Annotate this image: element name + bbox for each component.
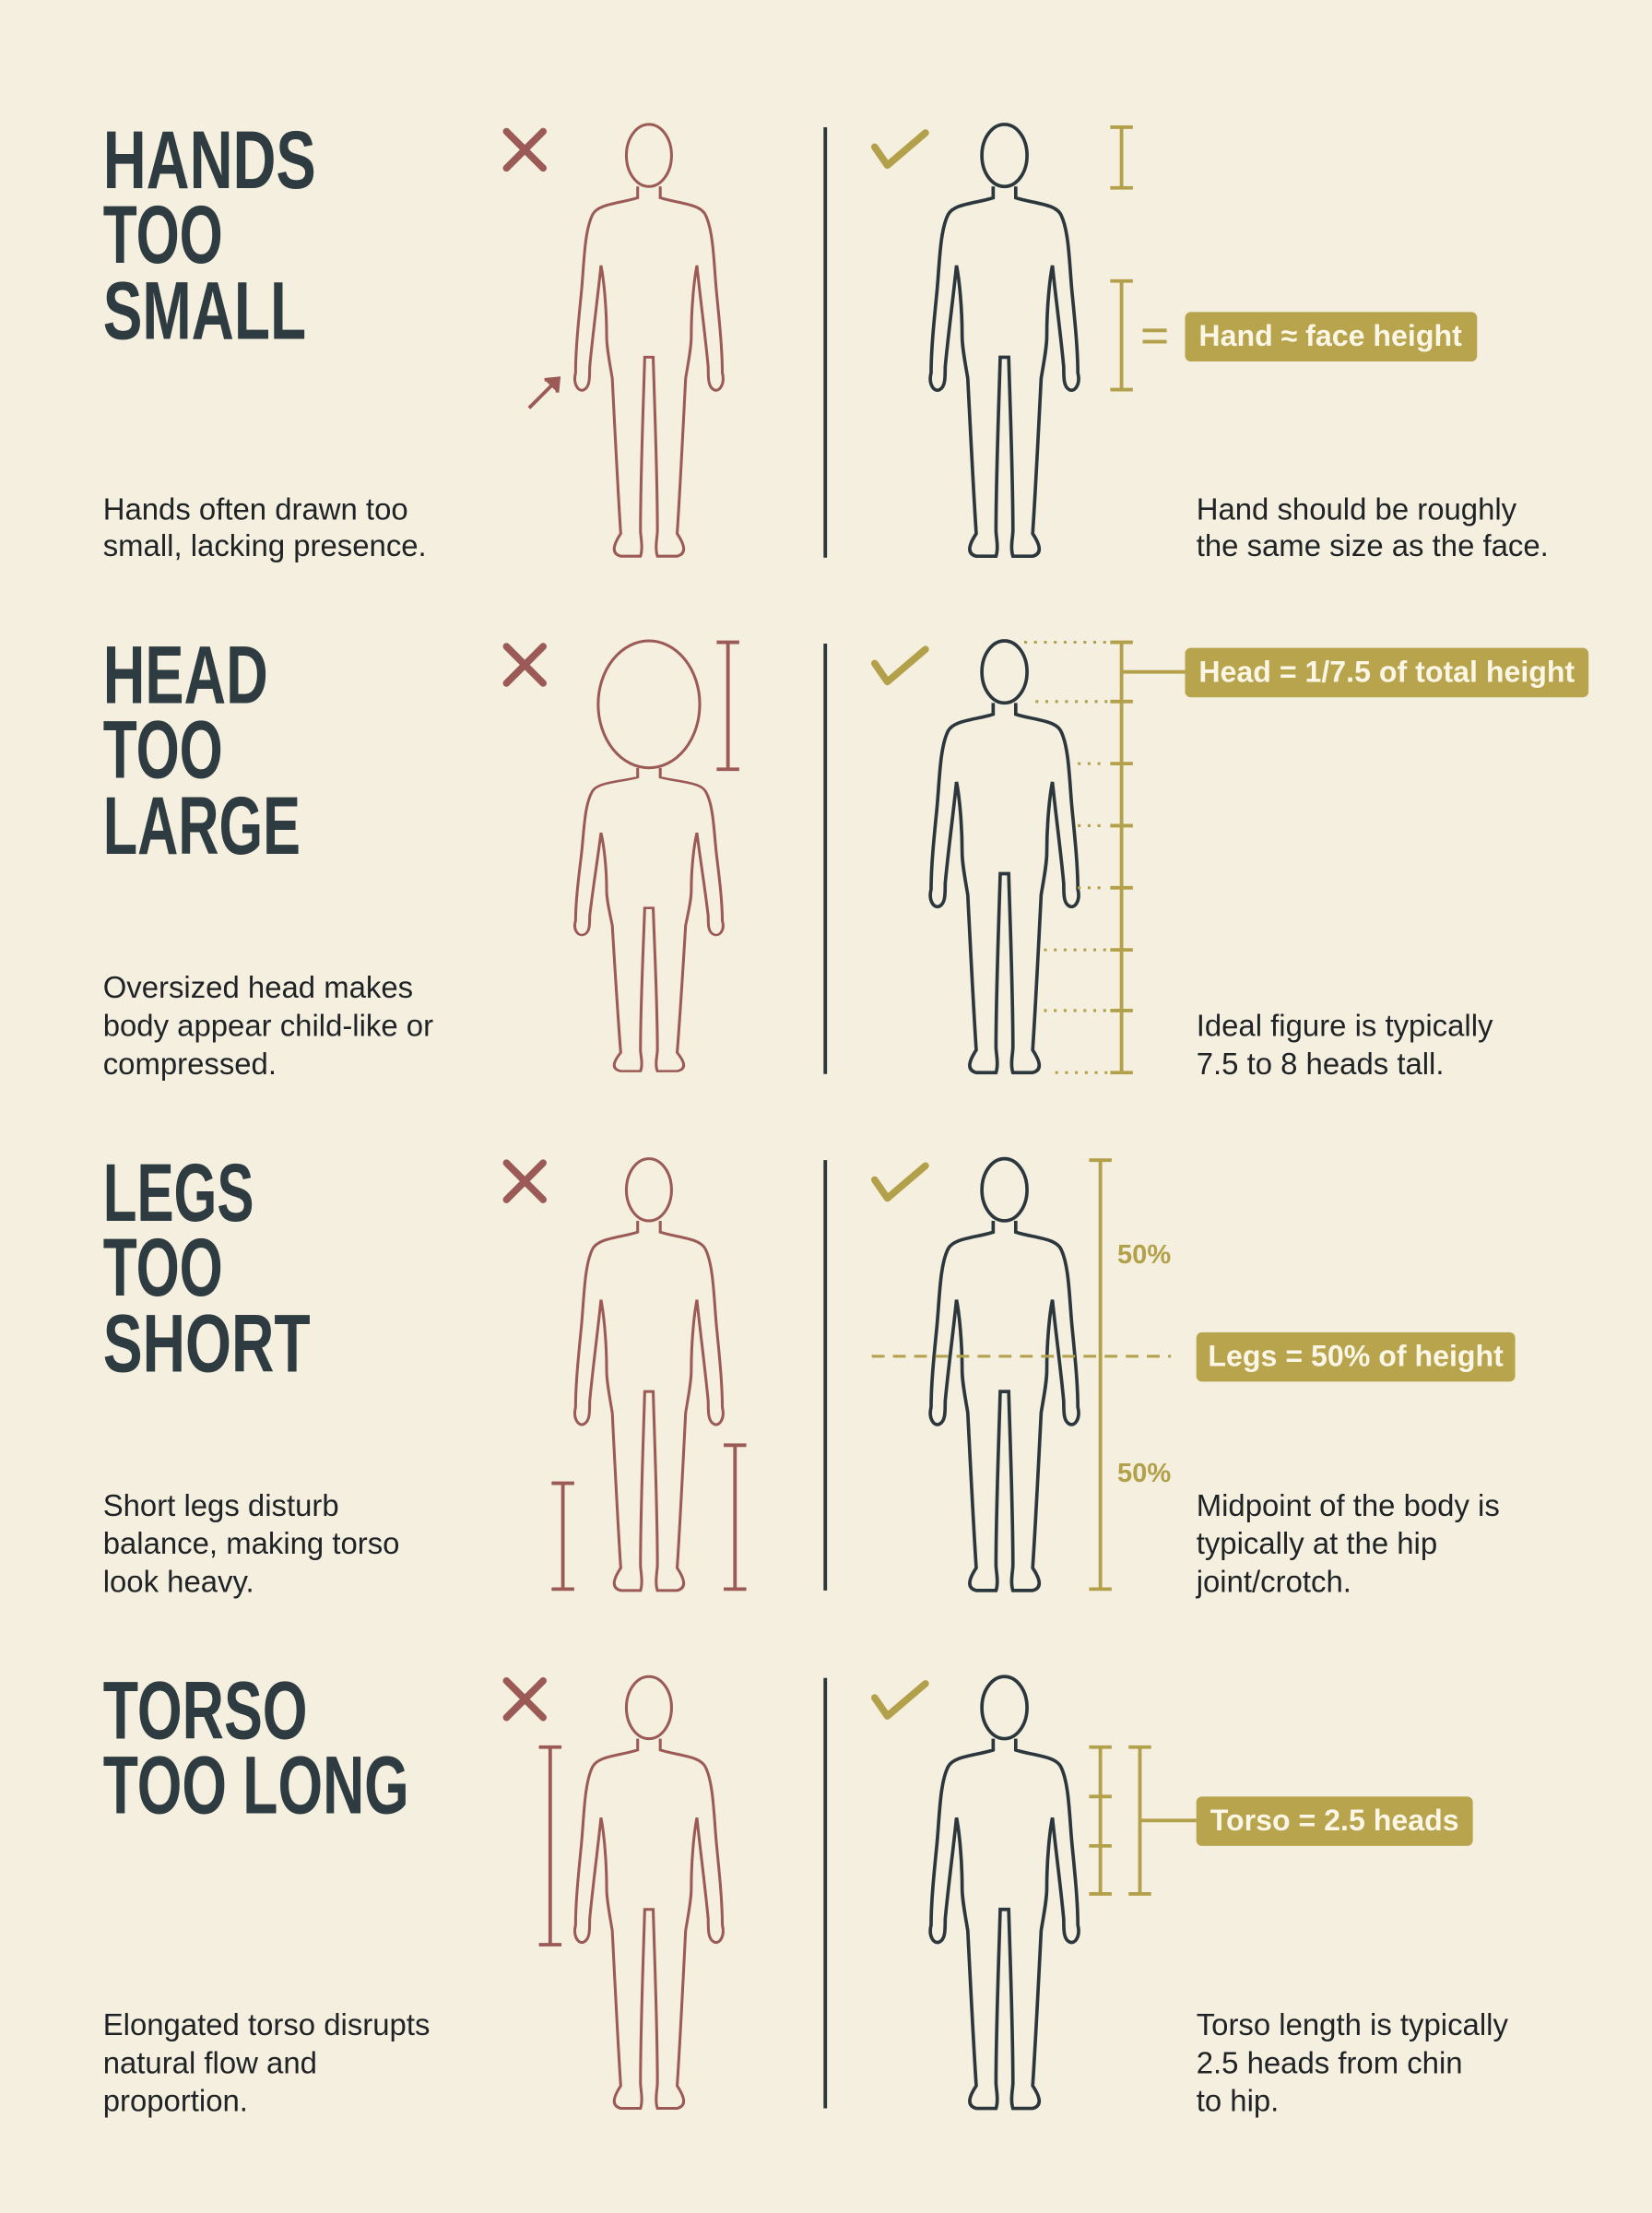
label: hand face height: Hand ≈ face height [1198,319,1462,352]
text: correct legs description: Midpoint of the body is [1197,1488,1500,1522]
text: correct torso description: Torso length is typically [1197,2007,1508,2041]
measure: red head bracket [716,643,739,769]
text: correct torso description: 2.5 heads from chin [1197,2045,1463,2079]
measure: red torso bracket [539,1747,561,1945]
title: head too large: HEAD [103,629,268,720]
text: wrong head description: compressed. [103,1047,277,1081]
title: legs too short [103,1147,311,1390]
divider [824,644,826,1074]
title: legs too short: TOO [103,1222,223,1313]
figure: wrong small hands [575,124,723,556]
measure: face bracket [1110,127,1133,188]
title: head too large: TOO [103,704,223,795]
icon: check [875,1166,926,1198]
figure: wrong short legs [575,1159,723,1591]
figure: correct legs [930,1159,1079,1591]
text: 50 percent labels: 50% [1117,1240,1171,1270]
title: torso too long [103,1665,409,1831]
label: hand face height [1185,312,1477,361]
text: wrong torso description: Elongated torso disrupts [103,2007,430,2041]
text: wrong legs description: balance, making torso [103,1526,399,1560]
text: wrong torso description: proportion. [103,2084,248,2118]
text: correct legs description: joint/crotch. [1196,1564,1351,1598]
text: 50 percent labels [1117,1240,1171,1488]
title: torso too long: TOO LONG [103,1740,409,1831]
divider [824,1160,826,1591]
title: hands too small: HANDS [103,114,316,206]
figure: correct hands [930,124,1079,556]
title: head too large [103,629,301,871]
figure: correct 7.5 heads [930,641,1079,1072]
panel: legs too short [103,1147,1516,1598]
measure: torso brackets [1089,1747,1197,1894]
figure: wrong long torso [575,1676,723,2109]
divider [824,1678,826,2109]
panel: torso too long [103,1665,1508,2118]
measure: head scale [1024,643,1185,1072]
measure: half split [872,1160,1171,1589]
text: correct hands description: the same size as the face. [1197,528,1549,562]
title: head too large: LARGE [103,780,301,871]
panel: hands too small [103,114,1549,562]
icon: cross [506,1163,543,1200]
title: hands too small [103,114,316,357]
label: torso ratio: Torso = 2.5 heads [1210,1804,1459,1837]
title: legs too short: LEGS [103,1147,254,1238]
divider [824,127,826,558]
panel: head too large [103,629,1588,1081]
icon: cross [506,132,543,168]
figure: wrong big head [575,641,723,1071]
title: torso too long: TORSO [103,1665,308,1757]
icon: cross [506,1681,543,1718]
arrow: pointing to hand [529,378,559,408]
text: correct legs description: typically at the hip [1197,1526,1437,1560]
text: wrong hands description: small, lacking presence. [103,528,427,562]
title: hands too small: SMALL [103,266,306,357]
label: head ratio: Head = 1/7.5 of total height [1198,655,1575,688]
title: legs too short: SHORT [103,1298,311,1390]
text: wrong head description: Oversized head makes [103,970,413,1004]
text: wrong torso description: natural flow and [103,2045,317,2079]
text: correct torso description: to hip. [1197,2084,1279,2118]
text: 50 percent labels: 50% [1117,1459,1171,1488]
text: wrong legs description: look heavy. [103,1564,254,1598]
text: correct head description: 7.5 to 8 heads tall. [1197,1047,1445,1081]
measure: hand bracket [1110,281,1167,390]
figure: correct torso [930,1676,1079,2109]
label: legs ratio [1197,1332,1516,1381]
label: head ratio [1185,648,1588,697]
label: torso ratio [1197,1796,1473,1846]
text: wrong hands description: Hands often drawn too [103,491,408,526]
text: correct head description: Ideal figure is typically [1197,1008,1493,1042]
text: correct hands description: Hand should be roughly [1197,491,1516,526]
icon: check [875,649,926,681]
title: hands too small: TOO [103,189,223,280]
text: wrong head description: body appear child-like or [103,1008,433,1042]
label: legs ratio: Legs = 50% of height [1208,1340,1504,1373]
icon: check [875,1684,926,1716]
icon: cross [506,646,543,683]
measure: red leg brackets [551,1445,747,1589]
icon: check [875,133,926,165]
text: wrong legs description: Short legs disturb [103,1488,339,1522]
